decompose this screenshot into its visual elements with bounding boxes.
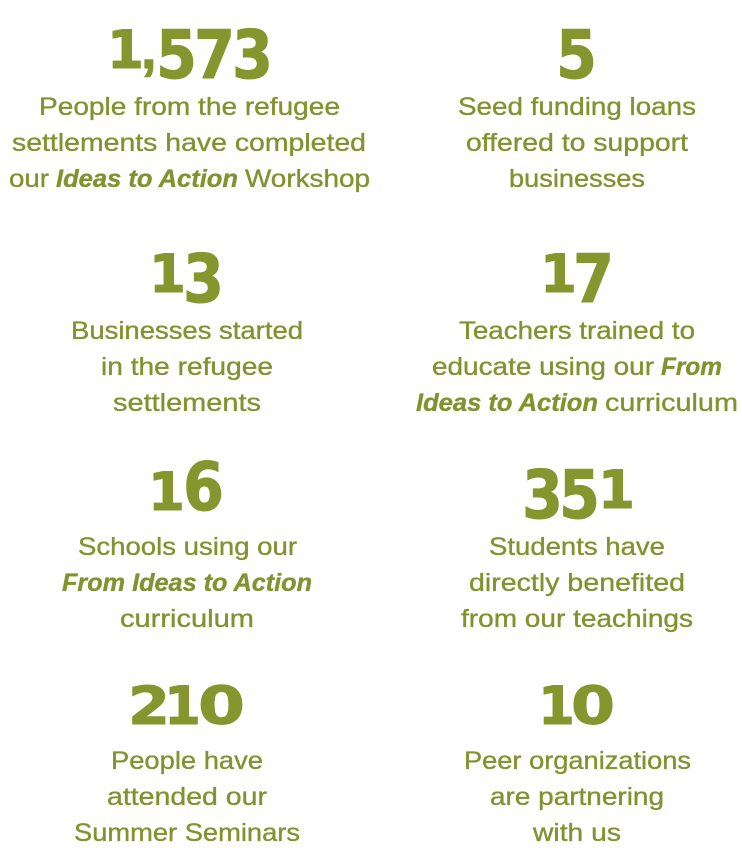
description (458, 93, 696, 193)
description: in the refugee (101, 353, 273, 381)
description: Teachers trained to (459, 317, 695, 345)
description: with us (532, 819, 621, 847)
description: People have (111, 747, 263, 775)
description: from our teachings (461, 605, 693, 633)
description: curriculum (605, 389, 738, 417)
description (461, 533, 693, 633)
description: are partnering (490, 783, 664, 811)
number: 351: 5 (559, 456, 600, 534)
description: Schools using our (78, 533, 297, 561)
description: Peer organizations (464, 747, 691, 775)
number: 1,573: , (141, 17, 157, 80)
number: 13: 3 (183, 240, 224, 318)
description (74, 747, 300, 847)
description: Seed funding loans (458, 93, 696, 121)
stat: 5 seed funding loans (458, 16, 696, 193)
description: Businesses started (71, 317, 303, 345)
number: 17: 7 (573, 240, 614, 318)
description: our (9, 165, 49, 193)
number: 5: 5 (556, 16, 597, 94)
number: 1,573: 7 (194, 16, 235, 94)
description: educate using our (432, 353, 654, 381)
number: 16: 1 (148, 462, 185, 523)
description: Ideas to Action (56, 165, 238, 193)
description: Ideas to Action (416, 389, 598, 417)
description: Students have (489, 533, 665, 561)
description: attended our (107, 783, 267, 811)
number: 210: 1 (164, 676, 201, 737)
number: 10: 1 (538, 676, 575, 737)
description (71, 317, 303, 417)
stat: 210 seminar attendees (74, 676, 300, 847)
description: businesses (509, 165, 645, 193)
stat: 10 peer organizations (464, 676, 691, 847)
number: 1,573: 3 (232, 16, 273, 94)
stat: 351 students (461, 456, 693, 633)
number: 17: 1 (540, 244, 577, 305)
description (464, 747, 691, 847)
description: directly benefited (469, 569, 685, 597)
number: 210: 0 (198, 676, 245, 737)
description: People from the refugee (39, 93, 340, 121)
number: 1,573: 5 (156, 16, 197, 94)
description: Summer Seminars (74, 819, 300, 847)
description (9, 93, 370, 193)
description: settlements have completed (12, 129, 366, 157)
description (62, 533, 312, 633)
description: From (661, 353, 722, 381)
description (416, 317, 738, 417)
stat: 1,573 workshop participants (9, 16, 370, 193)
number: 16: 6 (183, 448, 224, 526)
stat: 17 teachers trained (416, 240, 738, 417)
number: 10: 0 (571, 676, 615, 737)
description: From Ideas to Action (62, 569, 312, 597)
number: 210: 2 (128, 676, 170, 737)
number: 351: 1 (598, 460, 635, 521)
description: offered to support (466, 129, 688, 157)
number: 13: 1 (149, 244, 186, 305)
description: Workshop (245, 165, 370, 193)
number: 1,573: 1 (107, 20, 144, 81)
number: 351: 3 (522, 456, 563, 534)
stat: 13 businesses started (71, 240, 303, 417)
stat: 16 schools (62, 448, 312, 633)
description: curriculum (120, 605, 254, 633)
description: settlements (113, 389, 261, 417)
